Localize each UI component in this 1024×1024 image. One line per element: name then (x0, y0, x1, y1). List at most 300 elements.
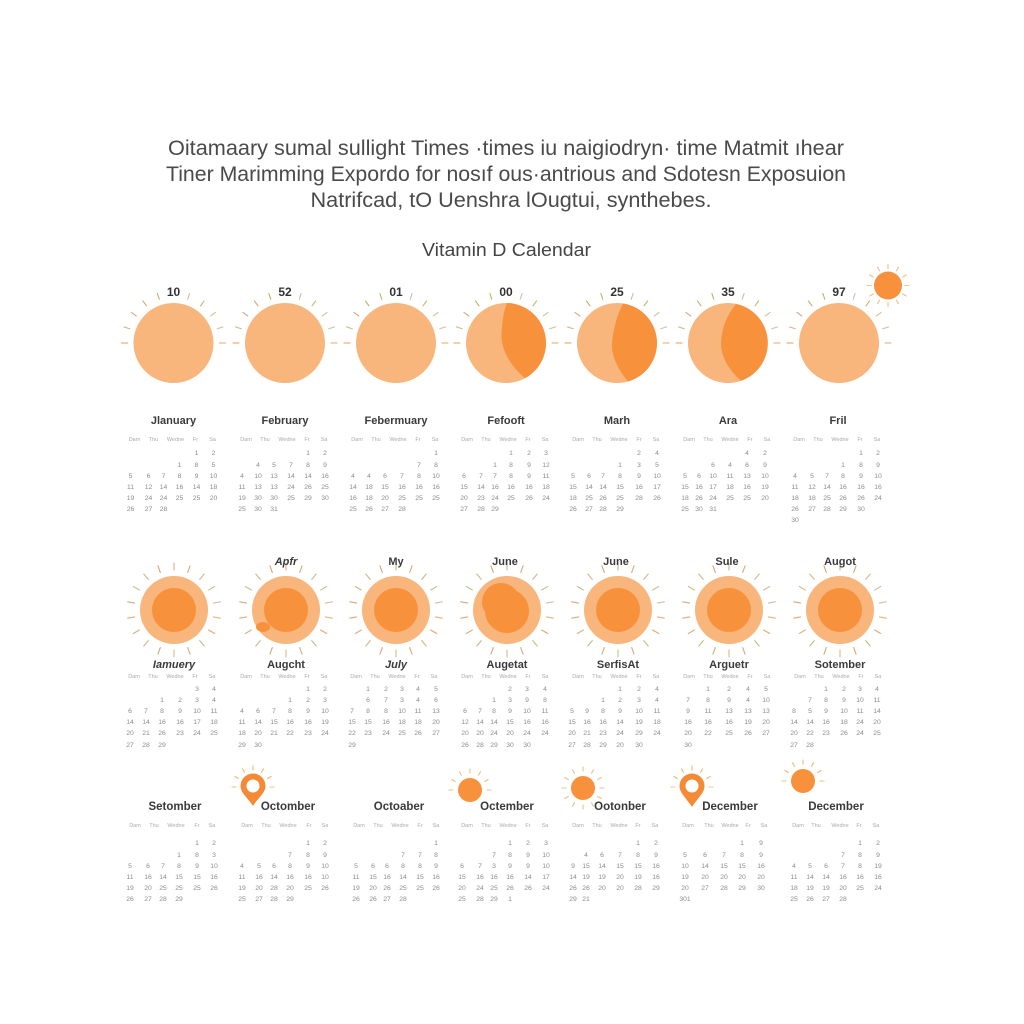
calendar: Arguetr: Dam (683, 674, 695, 680)
calendar: Octember: 16 (490, 874, 498, 881)
calendar: Augetat: 10 (523, 708, 531, 715)
icon: sun Ootonber (562, 767, 604, 809)
calendar: Sotember: 14 (806, 719, 814, 726)
calendar: July: 6 (434, 697, 438, 704)
calendar: Octomber (238, 801, 329, 903)
calendar: Sotember: 1 (824, 686, 828, 693)
calendar: Augcht: 21 (270, 730, 278, 737)
calendar: Octoaber: Thu (373, 823, 383, 829)
calendar: Ootonber: 19 (598, 874, 606, 881)
calendar: Octomber: 5 (257, 863, 261, 870)
icon: small sun top right (867, 264, 909, 306)
calendar: SerfisAt: 1 (601, 697, 605, 704)
calendar: Ara: 4 (745, 450, 749, 457)
calendar: Ootonber: 28 (634, 885, 642, 892)
calendar: Iamuery: 10 (193, 708, 201, 715)
calendar: Fefooft: 9 (527, 473, 531, 480)
row 2 suns (128, 563, 886, 657)
calendar: Octember: 16 (506, 874, 514, 881)
calendar: Octomber: 8 (288, 863, 292, 870)
calendar: Ara: 6 (697, 473, 701, 480)
calendar: Ara: 2 (763, 450, 767, 457)
calendar: December: 9 (759, 840, 763, 847)
calendar: Sotember: 23 (822, 730, 830, 737)
calendar: December: 20 (738, 874, 746, 881)
calendar: January (127, 415, 217, 513)
calendar: Marh: Sa (653, 437, 660, 443)
calendar: SerfisAt: 24 (653, 730, 661, 737)
calendar: December second: 24 (874, 885, 882, 892)
calendar: Ootonber: 26 (569, 885, 577, 892)
calendar: Fefooft: 8 (509, 473, 513, 480)
calendars row 1 (127, 415, 882, 524)
calendar: Arguetr: 2 (727, 686, 731, 693)
calendar: February: 29 (304, 495, 312, 502)
calendar: SerfisAt: 9 (585, 708, 589, 715)
calendar: Augetat: 16 (541, 719, 549, 726)
calendar: Ara: 16 (743, 484, 751, 491)
calendar: Fefooft: Thu (481, 437, 491, 443)
calendar: Fefooft: 16 (525, 484, 533, 491)
calendar: Iamuery: 24 (193, 730, 201, 737)
calendar: Febermuary: 7 (400, 473, 404, 480)
calendar: Iamuery: 11 (210, 708, 218, 715)
calendar: Ara: 25 (726, 495, 734, 502)
calendar: Augcht: 20 (254, 730, 262, 737)
calendar: Ootonber: 4 (584, 852, 588, 859)
sun: 00 partial phase: 00 (499, 285, 513, 299)
calendar: Augetat: 20 (461, 730, 469, 737)
calendar: February: 30 (270, 495, 278, 502)
calendar: Ootonber: Wedne (610, 823, 628, 829)
calendar: February: 2 (323, 450, 327, 457)
calendar: Octoaber: 19 (352, 885, 360, 892)
calendar: Setomber (126, 801, 218, 903)
calendar: Sotember: 9 (824, 708, 828, 715)
calendar: February: 4 (240, 473, 244, 480)
calendar: Marh: Marh (604, 415, 630, 427)
calendar: Ara: Dam (683, 437, 695, 443)
calendar: Octember: 28 (476, 896, 484, 903)
calendar: Sotember: Thu (814, 674, 824, 680)
calendar: Octoaber: 26 (383, 885, 391, 892)
calendar: Augcht: Thu (260, 674, 270, 680)
calendar: Octomber: 28 (270, 896, 278, 903)
calendar: Ootonber: 29 (652, 885, 660, 892)
calendar: Octomber: Sa (322, 823, 329, 829)
calendar: January: 1 (195, 450, 199, 457)
calendar: Fefooft: 26 (525, 495, 533, 502)
calendar: Iamuery: Wedne (166, 674, 184, 680)
calendar: July: 8 (366, 708, 370, 715)
calendar: Fril: 11 (791, 484, 799, 491)
sun: 97 (787, 285, 891, 383)
calendar: Fefooft: Fefooft (487, 415, 525, 427)
calendar: December second: 8 (858, 852, 862, 859)
calendar: Augcht: 14 (254, 719, 262, 726)
calendar: Setomber: 7 (161, 863, 165, 870)
icon: sun December (782, 760, 824, 793)
calendar: Sotember: 26 (840, 730, 848, 737)
calendar: Setomber: 1 (177, 852, 181, 859)
calendar: Arguetr: Arguetr (709, 659, 750, 671)
calendar: December second: 25 (856, 885, 864, 892)
calendar: Sotember: 9 (842, 697, 846, 704)
calendar: Augcht: 2 (323, 686, 327, 693)
calendar: Octember: 7 (492, 852, 496, 859)
calendar: SerfisAt: SerfisAt (597, 659, 639, 671)
calendar: Sotember: 22 (806, 730, 814, 737)
calendar: Iamuery: 2 (178, 697, 182, 704)
sun: 52: 52 (278, 285, 292, 299)
calendar: December: 29 (738, 885, 746, 892)
calendar: Setomber: 16 (144, 874, 152, 881)
calendar: Octoaber: 27 (383, 896, 391, 903)
calendar: Fril: 18 (808, 495, 816, 502)
calendar: July: 15 (348, 719, 356, 726)
calendar: Fefooft: 7 (493, 473, 497, 480)
calendar: Fefooft (460, 415, 550, 513)
calendar: SerfisAt (568, 659, 661, 749)
calendar: Ootonber: 19 (634, 874, 642, 881)
calendar: Arguetr: 8 (706, 697, 710, 704)
calendar: Fril: Thu (813, 437, 823, 443)
calendar: July: 6 (366, 697, 370, 704)
calendar: December second: Fr (856, 823, 862, 829)
calendar: Marh: 10 (653, 473, 661, 480)
calendar: Augcht (238, 659, 329, 749)
calendar: Setomber: 8 (195, 852, 199, 859)
calendar: Octoaber: 26 (369, 896, 377, 903)
calendar: Fril: 26 (857, 495, 865, 502)
calendar: Iamuery: 7 (144, 708, 148, 715)
calendar: Octomber: 20 (255, 885, 263, 892)
calendar: Octoaber: 16 (383, 874, 391, 881)
calendar: July: 25 (398, 730, 406, 737)
calendar: Marh: 27 (585, 506, 593, 513)
calendar: Arguetr: 13 (744, 708, 752, 715)
calendar: December: 15 (720, 863, 728, 870)
calendar: Augetat: 16 (523, 719, 531, 726)
calendar: Octomber: 4 (240, 863, 244, 870)
calendar: SerfisAt: 16 (583, 719, 591, 726)
calendar: Fefooft: 23 (477, 495, 485, 502)
calendar: Octoaber: 6 (371, 863, 375, 870)
calendar: February: 13 (270, 473, 278, 480)
calendar: Febermuary: 4 (367, 473, 371, 480)
calendar: February: 14 (304, 473, 312, 480)
calendar: December second: Thu (811, 823, 821, 829)
calendar: February: 26 (304, 484, 312, 491)
calendar: Fefooft: 1 (493, 462, 497, 469)
calendar: Fril: 26 (839, 495, 847, 502)
calendar: Marh: 5 (571, 473, 575, 480)
calendar: July: 4 (416, 697, 420, 704)
calendar: Augcht: Fr (304, 674, 310, 680)
calendar: Ara: 18 (726, 484, 734, 491)
calendar: Ara: Ara (719, 415, 738, 427)
calendar: Ara: 19 (761, 484, 769, 491)
calendar: Febermuary: 25 (432, 495, 440, 502)
calendar: Marh: 6 (587, 473, 591, 480)
calendar: Octember: 2 (526, 840, 530, 847)
calendar: Marh: 3 (637, 462, 641, 469)
calendar: Augetat: 11 (541, 708, 549, 715)
calendar: Ara: 13 (743, 473, 751, 480)
calendar: Octember: 20 (458, 885, 466, 892)
calendar: Fefooft: 9 (527, 462, 531, 469)
calendar: December: 7 (722, 852, 726, 859)
calendar: Sotember: Wedne (832, 674, 850, 680)
calendar: Octomber: 9 (306, 863, 310, 870)
calendar: Arguetr: 13 (725, 708, 733, 715)
calendar: Fefooft: 6 (462, 473, 466, 480)
calendar: SerfisAt: 16 (599, 719, 607, 726)
calendar: Augetat: 8 (543, 697, 547, 704)
calendar: Setomber: 27 (144, 896, 152, 903)
calendar: Fril: 4 (793, 473, 797, 480)
calendar: February: 24 (287, 484, 295, 491)
calendar: SerfisAt: Wedne (610, 674, 628, 680)
row 3 icons (232, 760, 824, 809)
calendar: Octoaber: 11 (352, 874, 360, 881)
calendar: Fril: Sa (874, 437, 881, 443)
calendar: Octoaber: 6 (385, 863, 389, 870)
calendar: Setomber: 25 (175, 885, 183, 892)
calendar: Fefooft: 8 (509, 462, 513, 469)
calendar: Sotember: Sa (875, 674, 882, 680)
calendar: Ootonber: 20 (598, 885, 606, 892)
calendar: December second: 9 (876, 852, 880, 859)
calendar: February: Fr (304, 437, 310, 443)
calendar: Febermuary: 25 (398, 495, 406, 502)
calendar: Marh: Wedne (610, 437, 628, 443)
calendar: January: 2 (212, 450, 216, 457)
calendar: Ootonber: Sa (652, 823, 659, 829)
calendar: Setomber: 11 (126, 874, 134, 881)
row 2 top month labels: Augot (824, 556, 856, 568)
calendar: Febermuary: 16 (398, 484, 406, 491)
calendar: December: Thu (704, 823, 714, 829)
calendar: Setomber: Thu (149, 823, 159, 829)
calendar: Octember: 16 (476, 874, 484, 881)
calendar: SerfisAt: 29 (599, 742, 607, 749)
calendar: Ara (681, 415, 771, 513)
calendar: Ara: 11 (726, 473, 734, 480)
calendar: July: 5 (434, 686, 438, 693)
calendar: Setomber: Dam (129, 823, 141, 829)
calendar: December second: Sa (873, 823, 880, 829)
calendar: Ara: 4 (728, 462, 732, 469)
calendar: Octoaber: Sa (433, 823, 440, 829)
calendar: December: 1 (740, 840, 744, 847)
calendar: Sotember: 28 (806, 742, 814, 749)
calendar: Ara: 31 (709, 506, 717, 513)
calendar: Octember: 25 (490, 885, 498, 892)
calendar: Ara: 26 (695, 495, 703, 502)
calendar: December second: 19 (822, 885, 830, 892)
calendar: February: 25 (321, 484, 329, 491)
calendar: July: 23 (364, 730, 372, 737)
calendar: December: 20 (720, 874, 728, 881)
calendar: December: 27 (701, 885, 709, 892)
calendar: Octomber: 14 (270, 874, 278, 881)
calendar: Marh: Thu (592, 437, 602, 443)
calendar: Febermuary: 16 (349, 495, 357, 502)
calendar: Augcht: Augcht (267, 659, 305, 671)
calendar: Augetat: 9 (508, 708, 512, 715)
calendar: Fefooft: 11 (542, 473, 550, 480)
calendar: Augcht: 3 (323, 697, 327, 704)
calendar: Fril: 26 (791, 506, 799, 513)
calendar: February: Dam (240, 437, 252, 443)
calendar: SerfisAt: 20 (616, 742, 624, 749)
calendar: Augetat: Sa (542, 674, 549, 680)
calendar: December second: December (808, 801, 864, 813)
calendar: Marh: 8 (618, 473, 622, 480)
calendar: Sotember: 25 (873, 730, 881, 737)
calendar: January: 16 (176, 484, 183, 491)
calendar: Setomber: 1 (195, 840, 199, 847)
calendar: Marh: 16 (635, 484, 643, 491)
calendar: Sotember: 14 (873, 708, 881, 715)
calendar: Arguetr: 22 (704, 730, 712, 737)
calendar: Ootonber: 14 (569, 874, 577, 881)
calendar: Fefooft: 1 (509, 450, 513, 457)
calendar: Fril: 16 (874, 484, 882, 491)
calendar: Ara: 10 (709, 473, 717, 480)
calendar: January: 6 (147, 473, 151, 480)
calendar: February: 13 (254, 484, 262, 491)
calendar: Febermuary: Thu (371, 437, 381, 443)
calendar: Arguetr: 4 (746, 697, 750, 704)
calendar: January: 20 (210, 495, 217, 502)
calendar: Ootonber: 21 (582, 896, 590, 903)
calendar: Ootonber: Fr (635, 823, 641, 829)
sun: ring June second (572, 563, 664, 657)
calendar: Octoaber: Dam (353, 823, 365, 829)
calendar: Setomber: 3 (212, 852, 216, 859)
calendar: Fefooft: 12 (542, 462, 550, 469)
calendar: Febermuary: 25 (349, 506, 357, 513)
calendar: December: 28 (720, 885, 728, 892)
calendar: Iamuery: 25 (210, 730, 218, 737)
calendar: Fril: 1 (841, 462, 845, 469)
intro text block: Tiner Marimming Expordo for nosıf ous·antrious and Sdotesn Exposuion (166, 163, 846, 186)
calendar: July: Wedne (388, 674, 406, 680)
calendar: Fefooft: 27 (460, 506, 468, 513)
calendar: January: 1 (178, 462, 182, 469)
calendar: Octoaber: Octoaber (374, 801, 425, 813)
calendar: July: 10 (398, 708, 406, 715)
calendar: July: 7 (384, 697, 388, 704)
calendar: Octember: Thu (481, 823, 491, 829)
calendar: Fril: 7 (825, 473, 829, 480)
sun: 01: 01 (389, 285, 403, 299)
calendar: Augcht: 1 (306, 686, 310, 693)
calendar: Augcht: 11 (238, 719, 246, 726)
calendar: Setomber: 25 (193, 885, 201, 892)
calendar: Augetat: 7 (478, 708, 482, 715)
sun: ring Sule (683, 563, 775, 657)
calendar: Fril: 5 (810, 473, 814, 480)
calendar: Augcht: 2 (306, 697, 310, 704)
calendar: Sotember: Fr (858, 674, 864, 680)
sun: ring January (128, 563, 220, 657)
calendar: Ootonber: 2 (654, 840, 658, 847)
calendar: Augetat: Augetat (487, 659, 528, 671)
calendar: Octember: 10 (542, 863, 550, 870)
calendar: Ootonber: 15 (616, 863, 624, 870)
calendar: December second: 4 (792, 863, 796, 870)
calendar: Fril: Dam (793, 437, 805, 443)
calendar: Iamuery: 23 (176, 730, 184, 737)
calendar: Sotember: 10 (840, 708, 848, 715)
calendar: Marh: Dam (572, 437, 584, 443)
calendar: December: 30 (757, 885, 765, 892)
calendar: Febermuary: Sa (432, 437, 439, 443)
calendar: Iamuery: Sa (209, 674, 216, 680)
calendar: Febermuary: 25 (415, 495, 423, 502)
calendar: Octomber: 16 (304, 874, 312, 881)
calendar: Febermuary: 10 (432, 473, 440, 480)
calendar: Arguetr: 19 (744, 719, 752, 726)
calendar: Marh: 4 (655, 450, 659, 457)
calendar: Ootonber: Ootonber (594, 801, 646, 813)
calendar: February: Thu (260, 437, 270, 443)
calendar: Febermuary: Wedne (389, 437, 407, 443)
calendar: Octoaber: 9 (434, 863, 438, 870)
calendar: Setomber: 10 (210, 863, 218, 870)
calendar: December second: 16 (874, 874, 882, 881)
calendar: February: 9 (323, 462, 327, 469)
sun: 10 (122, 285, 226, 383)
calendar: Ootonber: 15 (634, 863, 642, 870)
calendar: Setomber: Sa (209, 823, 216, 829)
calendar: SerfisAt: 4 (655, 697, 659, 704)
row 2 top month labels: June (492, 556, 518, 568)
calendar: July: 27 (432, 730, 440, 737)
calendar: Augetat: 3 (508, 697, 512, 704)
calendar: December second: 19 (806, 885, 814, 892)
sun: 25 partial phase (565, 285, 669, 383)
icon: sun October (449, 769, 491, 802)
calendar: SerfisAt: 29 (635, 730, 643, 737)
calendar: Setomber: 9 (195, 863, 199, 870)
sun: 10: 10 (167, 285, 180, 299)
calendar: July: 26 (414, 730, 422, 737)
calendar: Augetat: 24 (541, 730, 549, 737)
calendar: Marh: 2 (637, 450, 641, 457)
calendar: Octoaber: 7 (401, 852, 405, 859)
calendar: Augetat: 8 (492, 708, 496, 715)
calendar: December second: 19 (874, 863, 882, 870)
calendar: December second (790, 801, 882, 903)
calendar: Iamuery: 14 (142, 719, 150, 726)
calendar: Octember: 26 (524, 885, 532, 892)
calendar: Augetat: 20 (506, 730, 514, 737)
calendar: January: 8 (178, 473, 182, 480)
calendar: Marh: 25 (585, 495, 593, 502)
calendar: Fril: Fril (829, 415, 847, 427)
calendar: December: 5 (683, 852, 687, 859)
calendar: December second: 26 (806, 896, 814, 903)
calendar: Augetat: Thu (481, 674, 491, 680)
calendar: Febermuary: 28 (398, 506, 406, 513)
calendar: Setomber: 28 (159, 896, 167, 903)
calendar: Octomber: 27 (255, 896, 263, 903)
calendar: Fefooft: Sa (542, 437, 549, 443)
